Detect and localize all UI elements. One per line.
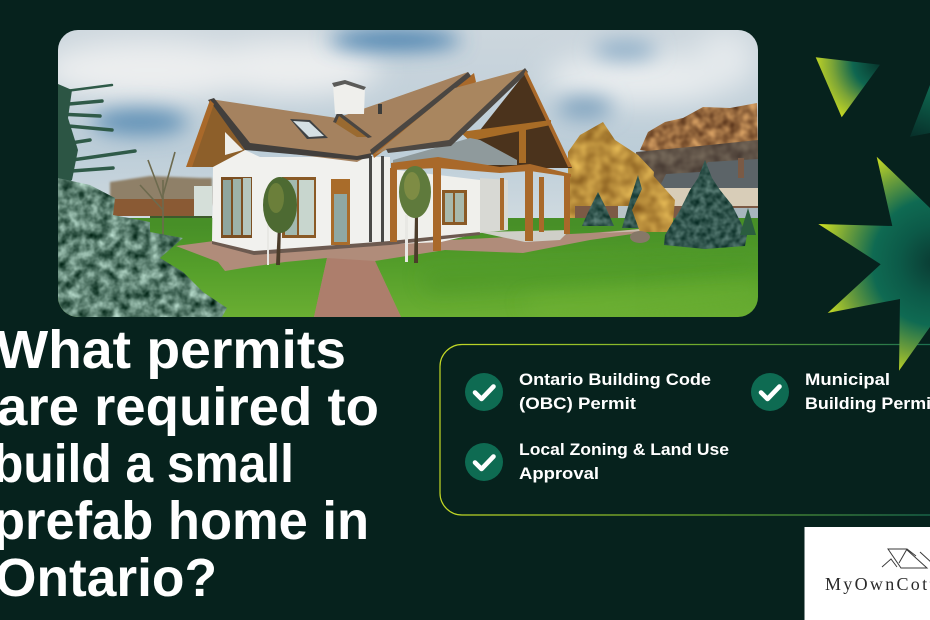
check item: OBC permit: (OBC) Permit [519,395,637,413]
logo: MyOwnCottage [804,527,930,620]
lawn [58,218,758,317]
right gable soffit and balcony [393,72,572,168]
check item: zoning: Local Zoning & Land Use [519,441,729,459]
title: prefab home in [0,491,369,551]
windows and door [221,156,467,245]
garden pines [582,160,756,249]
paved paths [176,229,670,317]
check item: zoning [465,441,729,483]
wooden posts and beams [390,157,571,251]
left fence and background yard [110,176,212,220]
dense foliage mass [58,178,227,317]
skylight, dormer and chimney [290,80,382,139]
house walls [212,150,566,255]
check item: zoning: Approval [519,465,599,483]
far house, right [575,158,758,218]
panel: permit checklist [440,344,930,515]
young trees in front of house [263,166,431,265]
decorative triangle, upper [816,57,880,117]
decorative star burst [818,157,930,371]
title: build a small [0,434,294,494]
blue spruce in the foreground [58,84,227,317]
check item: municipal permit: Municipal [805,371,890,389]
right roof [374,68,572,167]
distant autumn hillside [568,103,758,218]
background bare tree [140,152,175,235]
icon: roof outlines [882,549,930,568]
photo: prefab house on a lawn [40,30,758,317]
title: What permits [0,320,346,380]
check item: municipal permit: Building Permit [805,395,930,413]
title: Ontario? [0,548,217,608]
main roof [186,72,476,167]
sky with clouds [40,30,758,230]
upper branches [58,85,135,172]
title: are required to [0,377,379,437]
check item: OBC permit: Ontario Building Code [519,371,711,389]
decorative triangle, clipped right [910,85,930,137]
check item: OBC permit [465,371,711,413]
check item: municipal permit [751,371,930,413]
panel outline [440,344,930,515]
